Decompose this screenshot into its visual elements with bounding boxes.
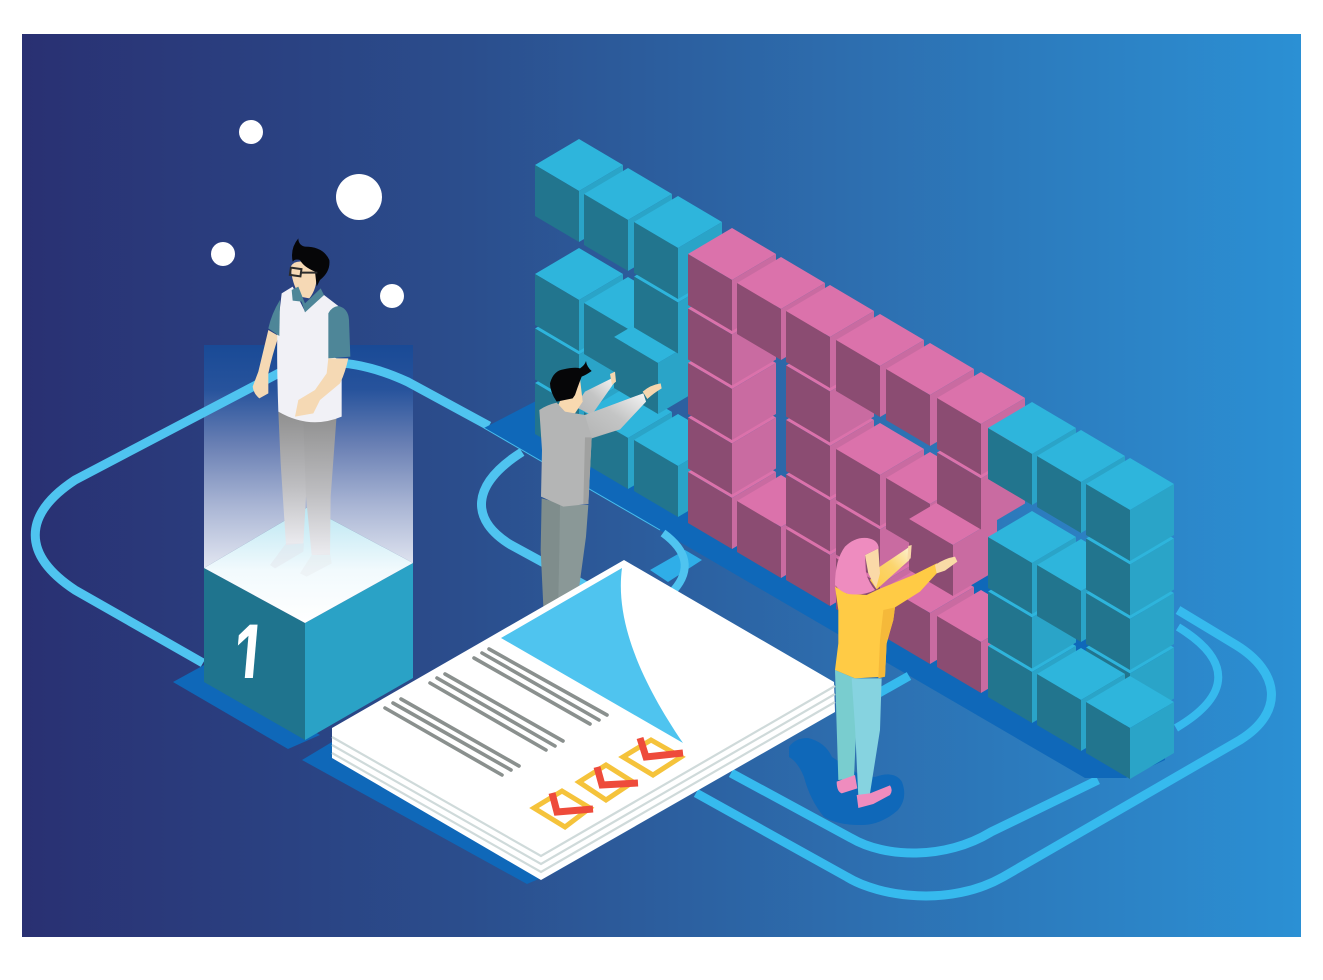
path loop left — [35, 363, 489, 663]
folded page corner — [501, 568, 683, 743]
document shadow — [302, 742, 560, 884]
letter block digit 2 cyan — [535, 139, 722, 517]
bubble left — [211, 242, 235, 266]
floor shadow under letters — [484, 400, 1165, 778]
letter block digit 0 cyan — [988, 402, 1174, 779]
letter block digit 2 pink — [836, 314, 1025, 693]
woman shadow — [789, 738, 904, 825]
checkbox two — [579, 765, 638, 800]
man with glasses on podium — [253, 238, 350, 577]
document stack — [332, 560, 835, 880]
bubble small top — [239, 120, 263, 144]
letter block digit 0 pink — [688, 228, 874, 606]
woman in yellow placing blocks — [835, 538, 957, 808]
number one: 1 — [228, 604, 270, 710]
man in grey placing blocks — [539, 361, 662, 607]
path inner loop left — [482, 452, 590, 588]
ring piece behind woman — [870, 676, 909, 698]
checkbox one — [534, 791, 593, 827]
bubble right — [380, 284, 404, 308]
document text lines — [385, 649, 607, 775]
podium box — [204, 507, 413, 740]
checkbox three — [623, 738, 683, 775]
bubble large — [336, 174, 382, 220]
podium shadow — [173, 665, 320, 749]
floor edge line — [484, 428, 660, 530]
ring piece near document — [650, 533, 702, 590]
glow column over podium — [204, 345, 413, 568]
path loops lower right — [696, 610, 1271, 896]
